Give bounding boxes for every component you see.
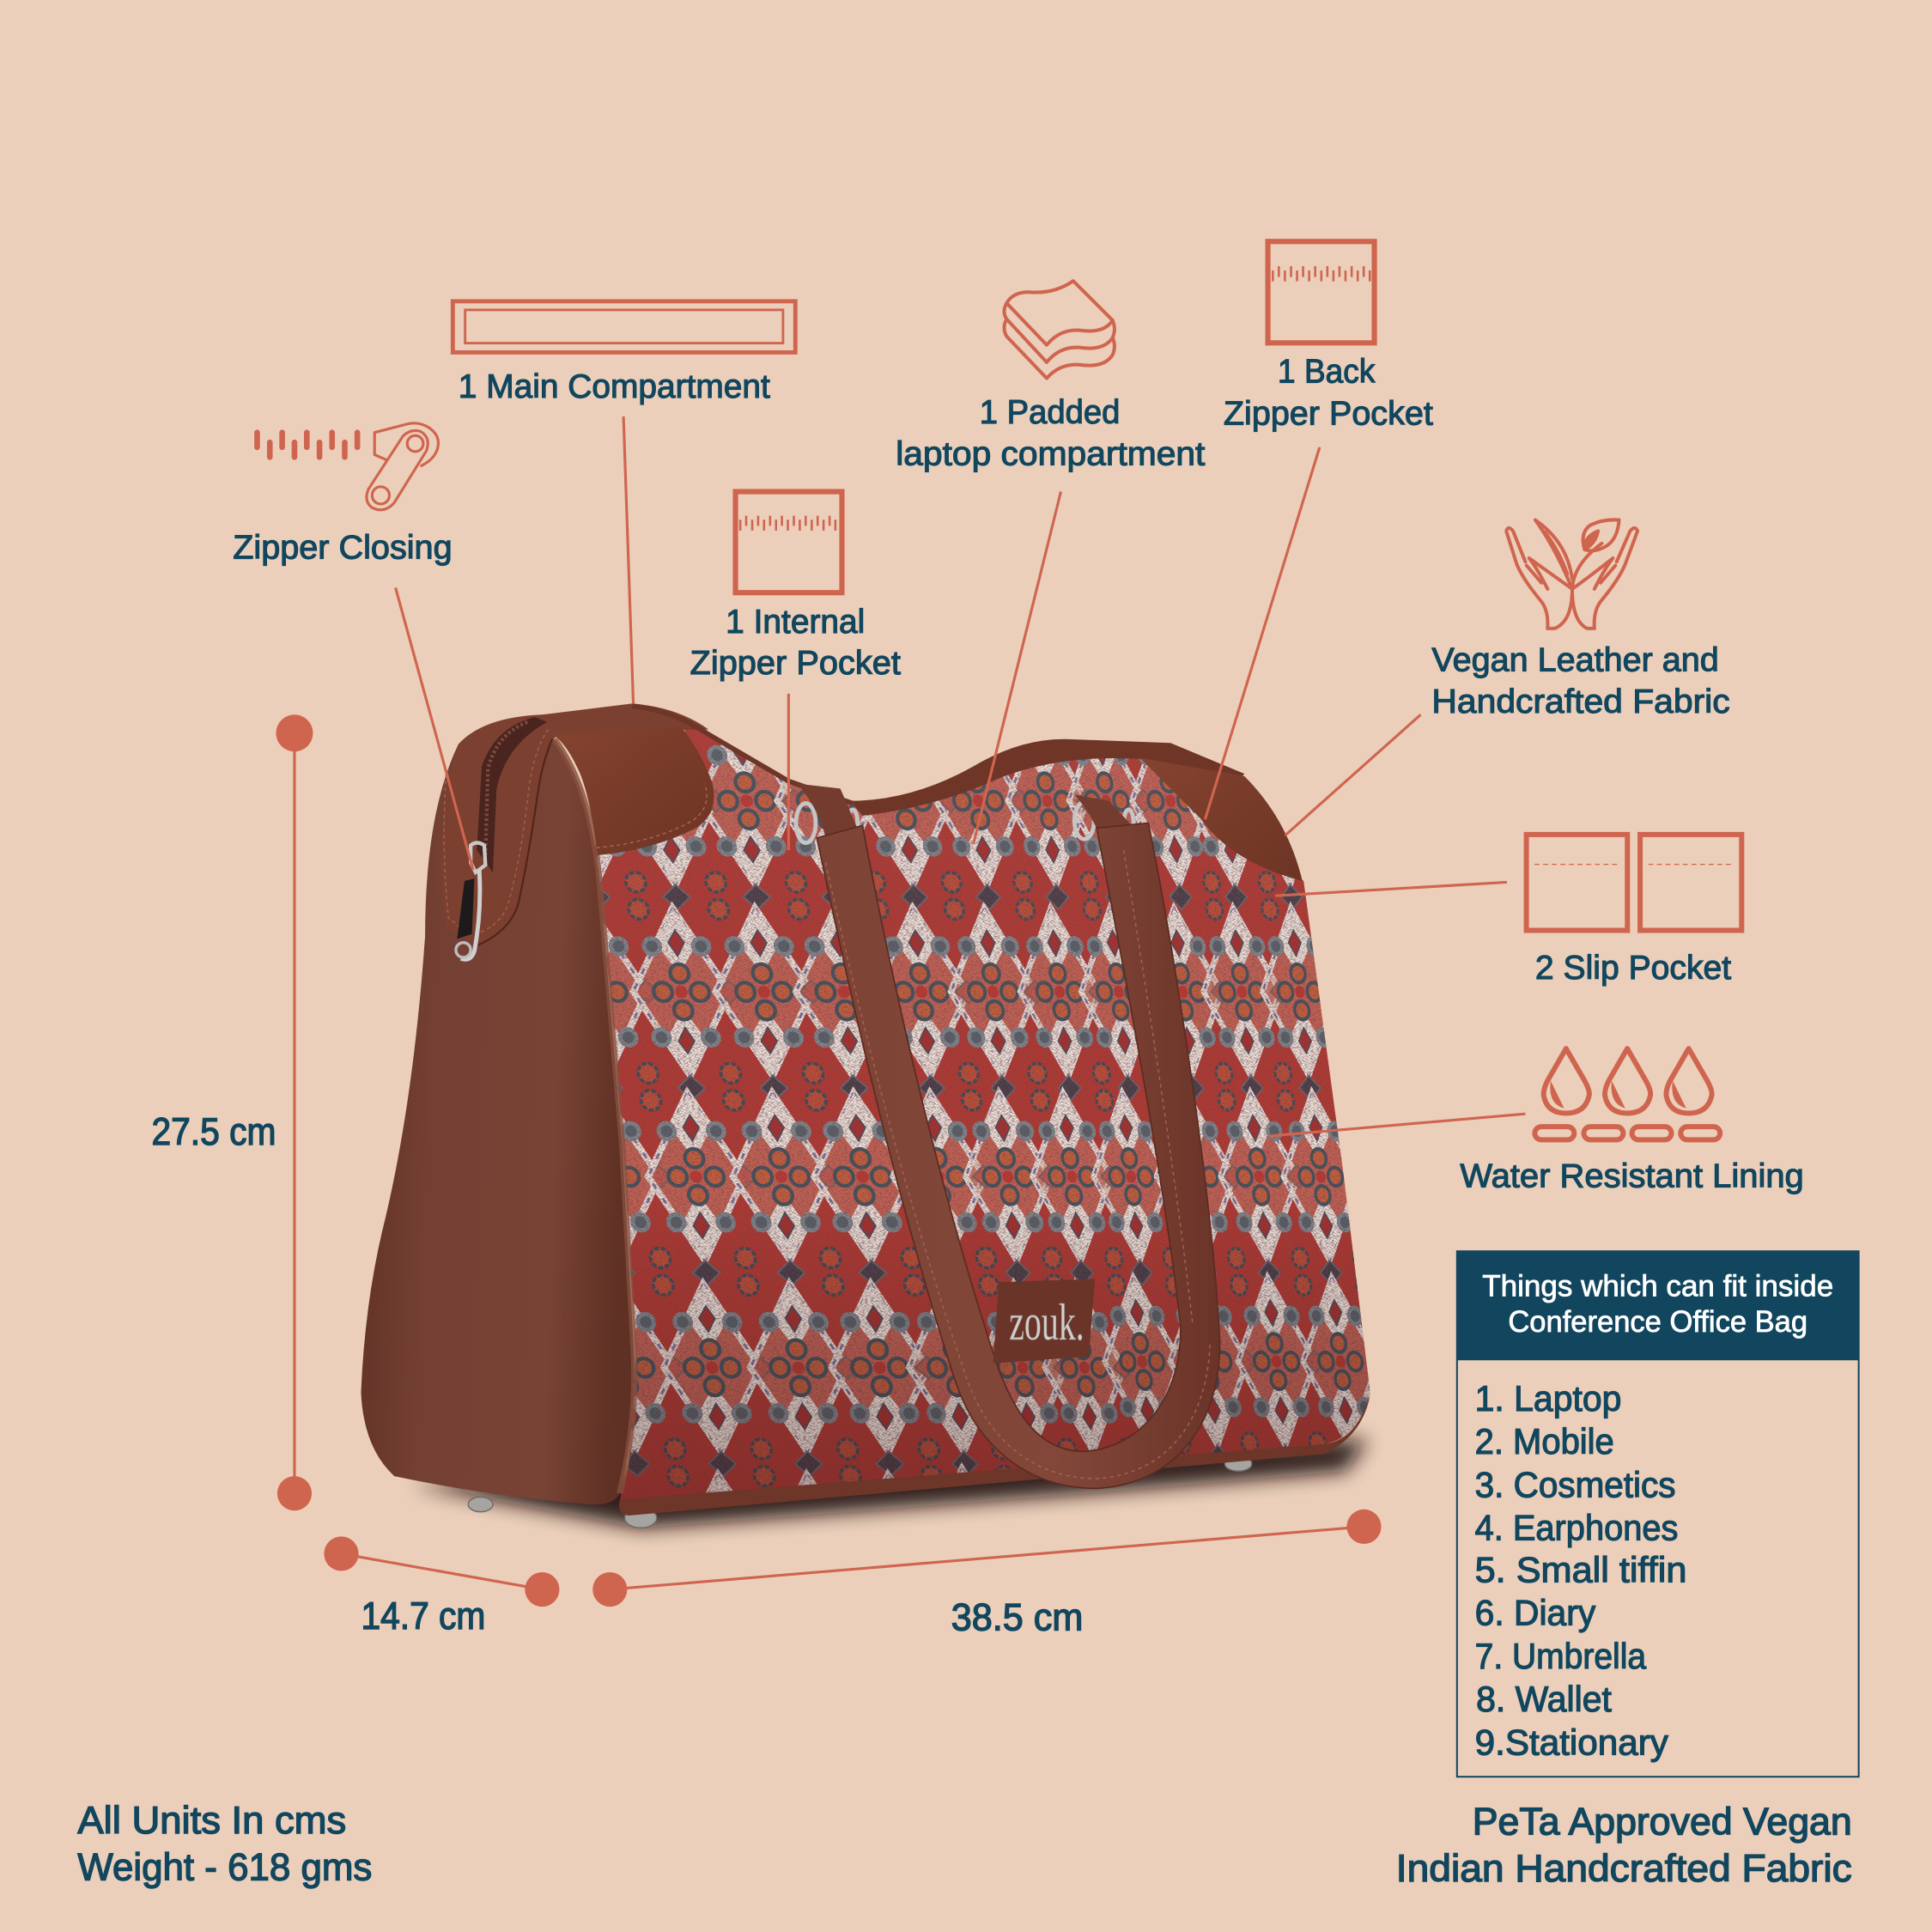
contents list: 3. Cosmetics xyxy=(1475,1464,1676,1504)
zipper teeth xyxy=(485,722,527,855)
metal feet xyxy=(468,1456,1252,1528)
bag product illustration xyxy=(361,702,1400,1677)
width dimension: 38.5 cm xyxy=(951,1596,1083,1638)
width dimension xyxy=(592,1510,1382,1638)
feature: zipper closing xyxy=(233,423,453,567)
icon: two pockets xyxy=(1527,835,1741,931)
PeTa and fabric note: Indian Handcrafted Fabric xyxy=(1396,1848,1852,1890)
side panel xyxy=(361,739,635,1504)
right corner patch xyxy=(1139,757,1303,881)
contents list: 9.Stationary xyxy=(1475,1722,1668,1762)
feature: internal zipper pocket xyxy=(690,492,901,682)
feature: padded laptop compartment: laptop compartment xyxy=(896,436,1206,473)
brand label xyxy=(993,1279,1095,1364)
depth dimension: 14.7 cm xyxy=(361,1595,485,1637)
bottom piping xyxy=(619,1394,1370,1516)
feature: internal zipper pocket: Zipper Pocket xyxy=(690,645,901,682)
top zipper flap xyxy=(441,703,708,945)
fabric front panel xyxy=(594,730,1370,1499)
panel: things which fit inside xyxy=(1456,1250,1859,1777)
panel frame xyxy=(1457,1251,1859,1777)
contents list: 6. Diary xyxy=(1475,1593,1595,1633)
top edge binding xyxy=(632,706,853,804)
leader lines xyxy=(396,416,1525,1136)
contents list: 7. Umbrella xyxy=(1475,1636,1647,1676)
panel heading: Conference Office Bag xyxy=(1508,1305,1807,1339)
PeTa and fabric note xyxy=(1396,1801,1852,1890)
contents list: 8. Wallet xyxy=(1476,1679,1612,1719)
flap stitching xyxy=(444,729,549,934)
metal rings xyxy=(796,802,1133,843)
back top band xyxy=(850,739,1244,816)
shoulder straps xyxy=(817,823,1220,1488)
units and weight note: Weight - 618 gms xyxy=(77,1847,372,1889)
contents list: 5. Small tiffin xyxy=(1475,1549,1686,1589)
icon: pocket xyxy=(736,492,842,592)
depth dimension xyxy=(324,1536,559,1637)
feature: padded laptop compartment xyxy=(896,281,1206,473)
feature: back zipper pocket: 1 Back xyxy=(1278,354,1376,391)
feature: padded laptop compartment: 1 Padded xyxy=(980,394,1120,431)
feature: slip pockets: 2 Slip Pocket xyxy=(1535,950,1731,987)
flap outline xyxy=(478,739,552,945)
brand label: zouk. xyxy=(1009,1294,1084,1352)
height dimension xyxy=(151,714,313,1510)
strap stitching xyxy=(825,850,1210,1479)
feature: back zipper pocket: Zipper Pocket xyxy=(1224,395,1433,432)
side piping seam xyxy=(555,739,635,1493)
feature: vegan leather and handcrafted fabric xyxy=(1431,519,1730,720)
feature: vegan leather and handcrafted fabric: Vegan Leather and xyxy=(1431,641,1719,678)
units and weight note xyxy=(77,1800,372,1889)
icon: zipper xyxy=(257,423,438,510)
zipper track xyxy=(477,717,547,872)
feature: internal zipper pocket: 1 Internal xyxy=(726,604,865,641)
contents list: 2. Mobile xyxy=(1475,1421,1614,1461)
puller tag xyxy=(457,878,474,939)
left corner patch xyxy=(555,727,714,855)
feature: back zipper pocket xyxy=(1224,241,1433,432)
PeTa and fabric note: PeTa Approved Vegan xyxy=(1473,1801,1852,1844)
feature: zipper closing: Zipper Closing xyxy=(233,530,453,567)
panel heading: Things which can fit inside xyxy=(1482,1270,1833,1303)
feature: main compartment xyxy=(453,301,795,405)
height dimension: 27.5 cm xyxy=(151,1111,276,1153)
contents list: 4. Earphones xyxy=(1475,1508,1678,1548)
icon: compartment xyxy=(453,301,795,352)
panel heading xyxy=(1456,1250,1859,1360)
icon: pocket xyxy=(1268,241,1375,343)
icon: hands with plant xyxy=(1506,519,1637,629)
feature: water resistant lining xyxy=(1460,1048,1804,1195)
icon: drops and lining xyxy=(1534,1048,1720,1139)
contents list: 1. Laptop xyxy=(1475,1378,1621,1419)
feature: water resistant lining: Water Resistant Lining xyxy=(1460,1158,1804,1195)
feature: vegan leather and handcrafted fabric: Handcrafted Fabric xyxy=(1431,683,1730,720)
contents list xyxy=(1475,1378,1686,1762)
ground shadow xyxy=(413,1439,1368,1528)
feature: main compartment: 1 Main Compartment xyxy=(459,368,770,405)
feature: slip pockets xyxy=(1527,835,1741,987)
zipper puller xyxy=(456,843,485,959)
patch stitching xyxy=(597,784,707,848)
strap tabs xyxy=(797,784,1144,850)
units and weight note: All Units In cms xyxy=(77,1800,346,1842)
icon: padded layers xyxy=(1004,281,1115,379)
